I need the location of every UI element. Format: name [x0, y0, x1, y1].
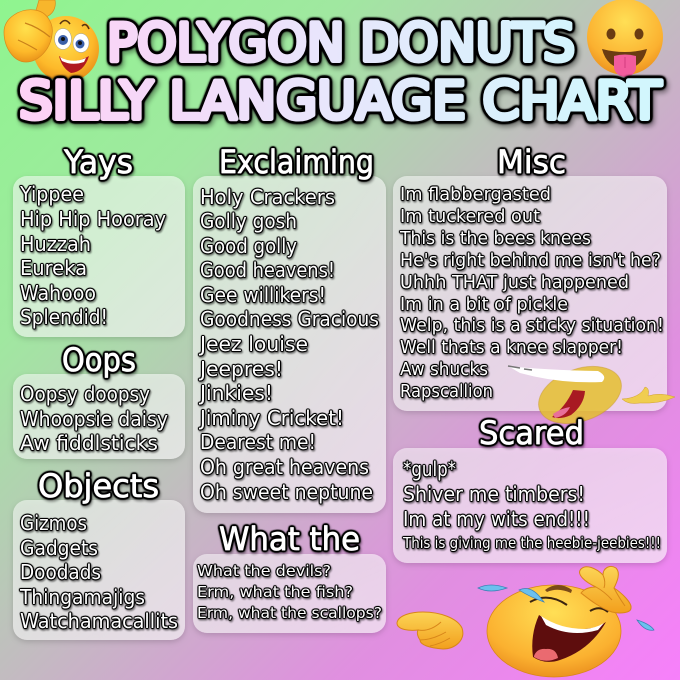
text: objects list: Watchamacallits	[20, 609, 178, 633]
text: objects list	[19, 511, 178, 633]
text: misc list	[399, 185, 664, 402]
panel: scared	[393, 414, 667, 563]
text: yays list: Eureka	[20, 256, 87, 280]
text: what the list: Erm, what the fish?	[197, 583, 353, 601]
text: oops list: Aw fiddlsticks	[20, 431, 158, 455]
panel: oops	[13, 341, 185, 459]
text: yays list	[19, 182, 166, 329]
heading: oops: Oops	[62, 341, 136, 379]
text: scared list: Shiver me timbers!	[403, 482, 585, 506]
heading: what the: What the	[219, 520, 360, 558]
text: exclaiming list: Golly gosh	[200, 209, 297, 233]
text: scared list: Im at my wits end!!!	[403, 507, 590, 531]
text: yays list: Huzzah	[20, 232, 91, 256]
text: objects list: Doodads	[20, 560, 101, 584]
text: misc list: Rapscallion	[400, 382, 493, 402]
text: exclaiming list: Gee willikers!	[200, 283, 326, 307]
heading: scared: Scared	[479, 414, 584, 452]
text: misc list: Aw shucks	[400, 360, 488, 380]
text: exclaiming list: Goodness Gracious	[200, 307, 379, 331]
panel: what the	[193, 520, 386, 633]
icon: laughing emoji with tears	[478, 566, 654, 677]
text: misc list: Im flabbergasted	[400, 185, 551, 205]
text: what the list	[197, 562, 382, 622]
panel: misc	[393, 143, 667, 411]
text: misc list: This is the bees knees	[399, 229, 591, 249]
text: misc list: Uhhh THAT just happened	[400, 273, 629, 293]
text: exclaiming list: Jeez louise	[198, 332, 308, 356]
heading: exclaiming: Exclaiming	[219, 143, 374, 181]
heading: yays: Yays	[63, 143, 133, 181]
text: exclaiming list: Holy Crackers	[200, 185, 335, 209]
text: objects list: Gizmos	[20, 511, 87, 535]
text: exclaiming list	[198, 185, 379, 504]
title	[19, 14, 661, 132]
text: oops list: Oopsy doopsy	[20, 382, 150, 406]
text: exclaiming list: Jinkies!	[198, 381, 273, 405]
panel: objects	[13, 467, 185, 640]
panel: exclaiming	[193, 143, 386, 513]
text: exclaiming list: Oh great heavens	[200, 455, 369, 479]
title: POLYGON DONUTS	[107, 14, 575, 74]
icon: tongue emoji	[587, 0, 663, 77]
text: yays list: Yippee	[19, 182, 84, 206]
text: yays list: Hip Hip Hooray	[20, 207, 166, 231]
text: yays list: Splendid!	[20, 305, 108, 329]
text: misc list: Well thats a knee slapper!	[400, 338, 623, 358]
heading: misc: Misc	[497, 143, 566, 181]
icon: pointing hand	[397, 612, 463, 649]
text: oops list: Whoopsie daisy	[20, 407, 168, 431]
text: scared list	[402, 457, 661, 552]
title: SILLY LANGUAGE CHART	[19, 72, 661, 132]
text: objects list: Gadgets	[20, 536, 98, 560]
text: oops list	[20, 382, 168, 455]
text: misc list: Im tuckered out	[400, 207, 540, 227]
text: objects list: Thingamajigs	[19, 585, 145, 609]
text: misc list: Welp, this is a sticky situation!	[400, 316, 664, 336]
panel: yays	[13, 143, 185, 337]
text: misc list: He's right behind me isn't he?	[400, 251, 661, 271]
heading: objects: Objects	[38, 467, 159, 505]
icon: falling-over emoji	[508, 356, 675, 434]
text: exclaiming list: Jeepres!	[198, 357, 283, 381]
icon: thumbs-up smiley	[4, 0, 99, 82]
text: what the list: What the devils?	[197, 562, 331, 580]
text: misc list: Im in a bit of pickle	[400, 295, 568, 315]
text: exclaiming list: Dearest me!	[200, 430, 316, 454]
text: yays list: Wahooo	[20, 281, 96, 305]
text: scared list: *gulp*	[403, 457, 456, 481]
text: exclaiming list: Jiminy Cricket!	[198, 406, 344, 430]
text: what the list: Erm, what the scallops?	[197, 604, 382, 622]
text: exclaiming list: Oh sweet neptune	[200, 480, 373, 504]
text: exclaiming list: Good golly	[200, 234, 297, 258]
text: exclaiming list: Good heavens!	[200, 258, 335, 282]
